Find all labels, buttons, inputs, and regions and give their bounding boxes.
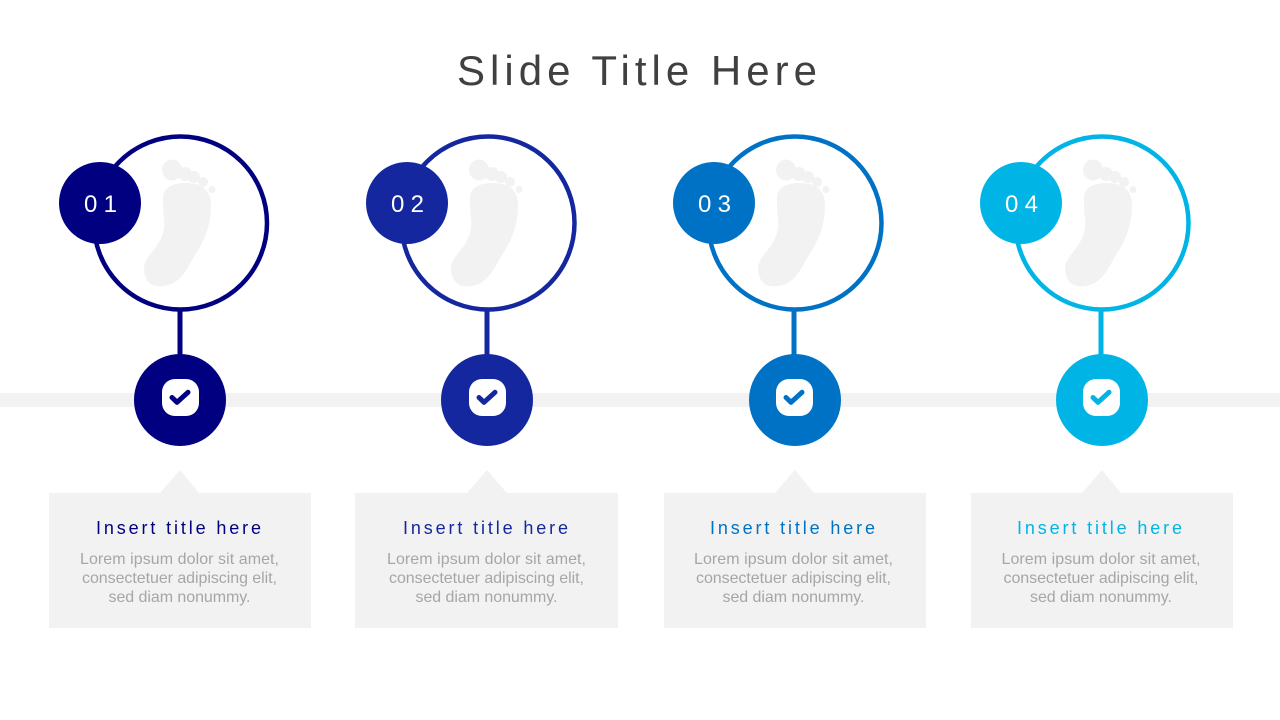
number badge 3 (673, 162, 755, 244)
connector 1 (178, 310, 182, 356)
card 1: Lorem ipsum dolor sit amet, (80, 551, 279, 568)
card 3: sed diam nonummy. (722, 589, 864, 606)
check badge 2 (441, 354, 533, 446)
number badge 4: 04 (1005, 191, 1038, 218)
card 2: Lorem ipsum dolor sit amet, (387, 551, 586, 568)
card 2: sed diam nonummy. (416, 589, 558, 606)
number badge 2: 02 (391, 191, 424, 218)
title: Slide Title Here (457, 47, 817, 94)
number badge 1: 01 (84, 191, 117, 218)
large ring 1 (94, 136, 267, 310)
large ring 4 (1016, 136, 1188, 310)
number badge 3: 03 (698, 191, 731, 218)
icon: footprint 3 (758, 160, 830, 286)
large ring 3 (708, 136, 882, 310)
card 3: consectetuer adipiscing elit, (696, 570, 891, 587)
large ring 2 (402, 136, 574, 310)
card 4: consectetuer adipiscing elit, (1004, 570, 1198, 587)
card 1: Insert title here (96, 518, 261, 538)
step 3 (664, 136, 926, 628)
card 2: consectetuer adipiscing elit, (389, 570, 584, 587)
step 1 (49, 136, 311, 628)
number badge 4 (980, 162, 1062, 244)
card 1 (49, 470, 311, 628)
icon: footprint 4 (1065, 160, 1136, 286)
check badge 1 (134, 354, 226, 446)
connector 2 (484, 310, 490, 356)
step 2 (355, 136, 618, 628)
icon: footprint 1 (144, 160, 216, 286)
card 4: Insert title here (1017, 518, 1182, 538)
card 1: consectetuer adipiscing elit, (82, 570, 277, 587)
card 4: sed diam nonummy. (1030, 589, 1172, 606)
step 4 (971, 136, 1233, 628)
card 3 (664, 470, 926, 628)
card 2 (355, 470, 618, 628)
connector 4 (1098, 310, 1104, 356)
card 1: sed diam nonummy. (108, 589, 250, 606)
check badge 4 (1056, 354, 1148, 446)
number badge 1 (59, 162, 141, 244)
card 3: Insert title here (710, 518, 875, 538)
card 3: Lorem ipsum dolor sit amet, (694, 551, 893, 568)
check badge 3 (749, 354, 841, 446)
card 4: Lorem ipsum dolor sit amet, (1002, 551, 1200, 568)
icon: footprint 2 (451, 160, 522, 286)
number badge 2 (366, 162, 448, 244)
connector 3 (792, 310, 796, 356)
timeline band (0, 393, 1280, 407)
card 2: Insert title here (403, 518, 568, 538)
card 4 (971, 470, 1233, 628)
